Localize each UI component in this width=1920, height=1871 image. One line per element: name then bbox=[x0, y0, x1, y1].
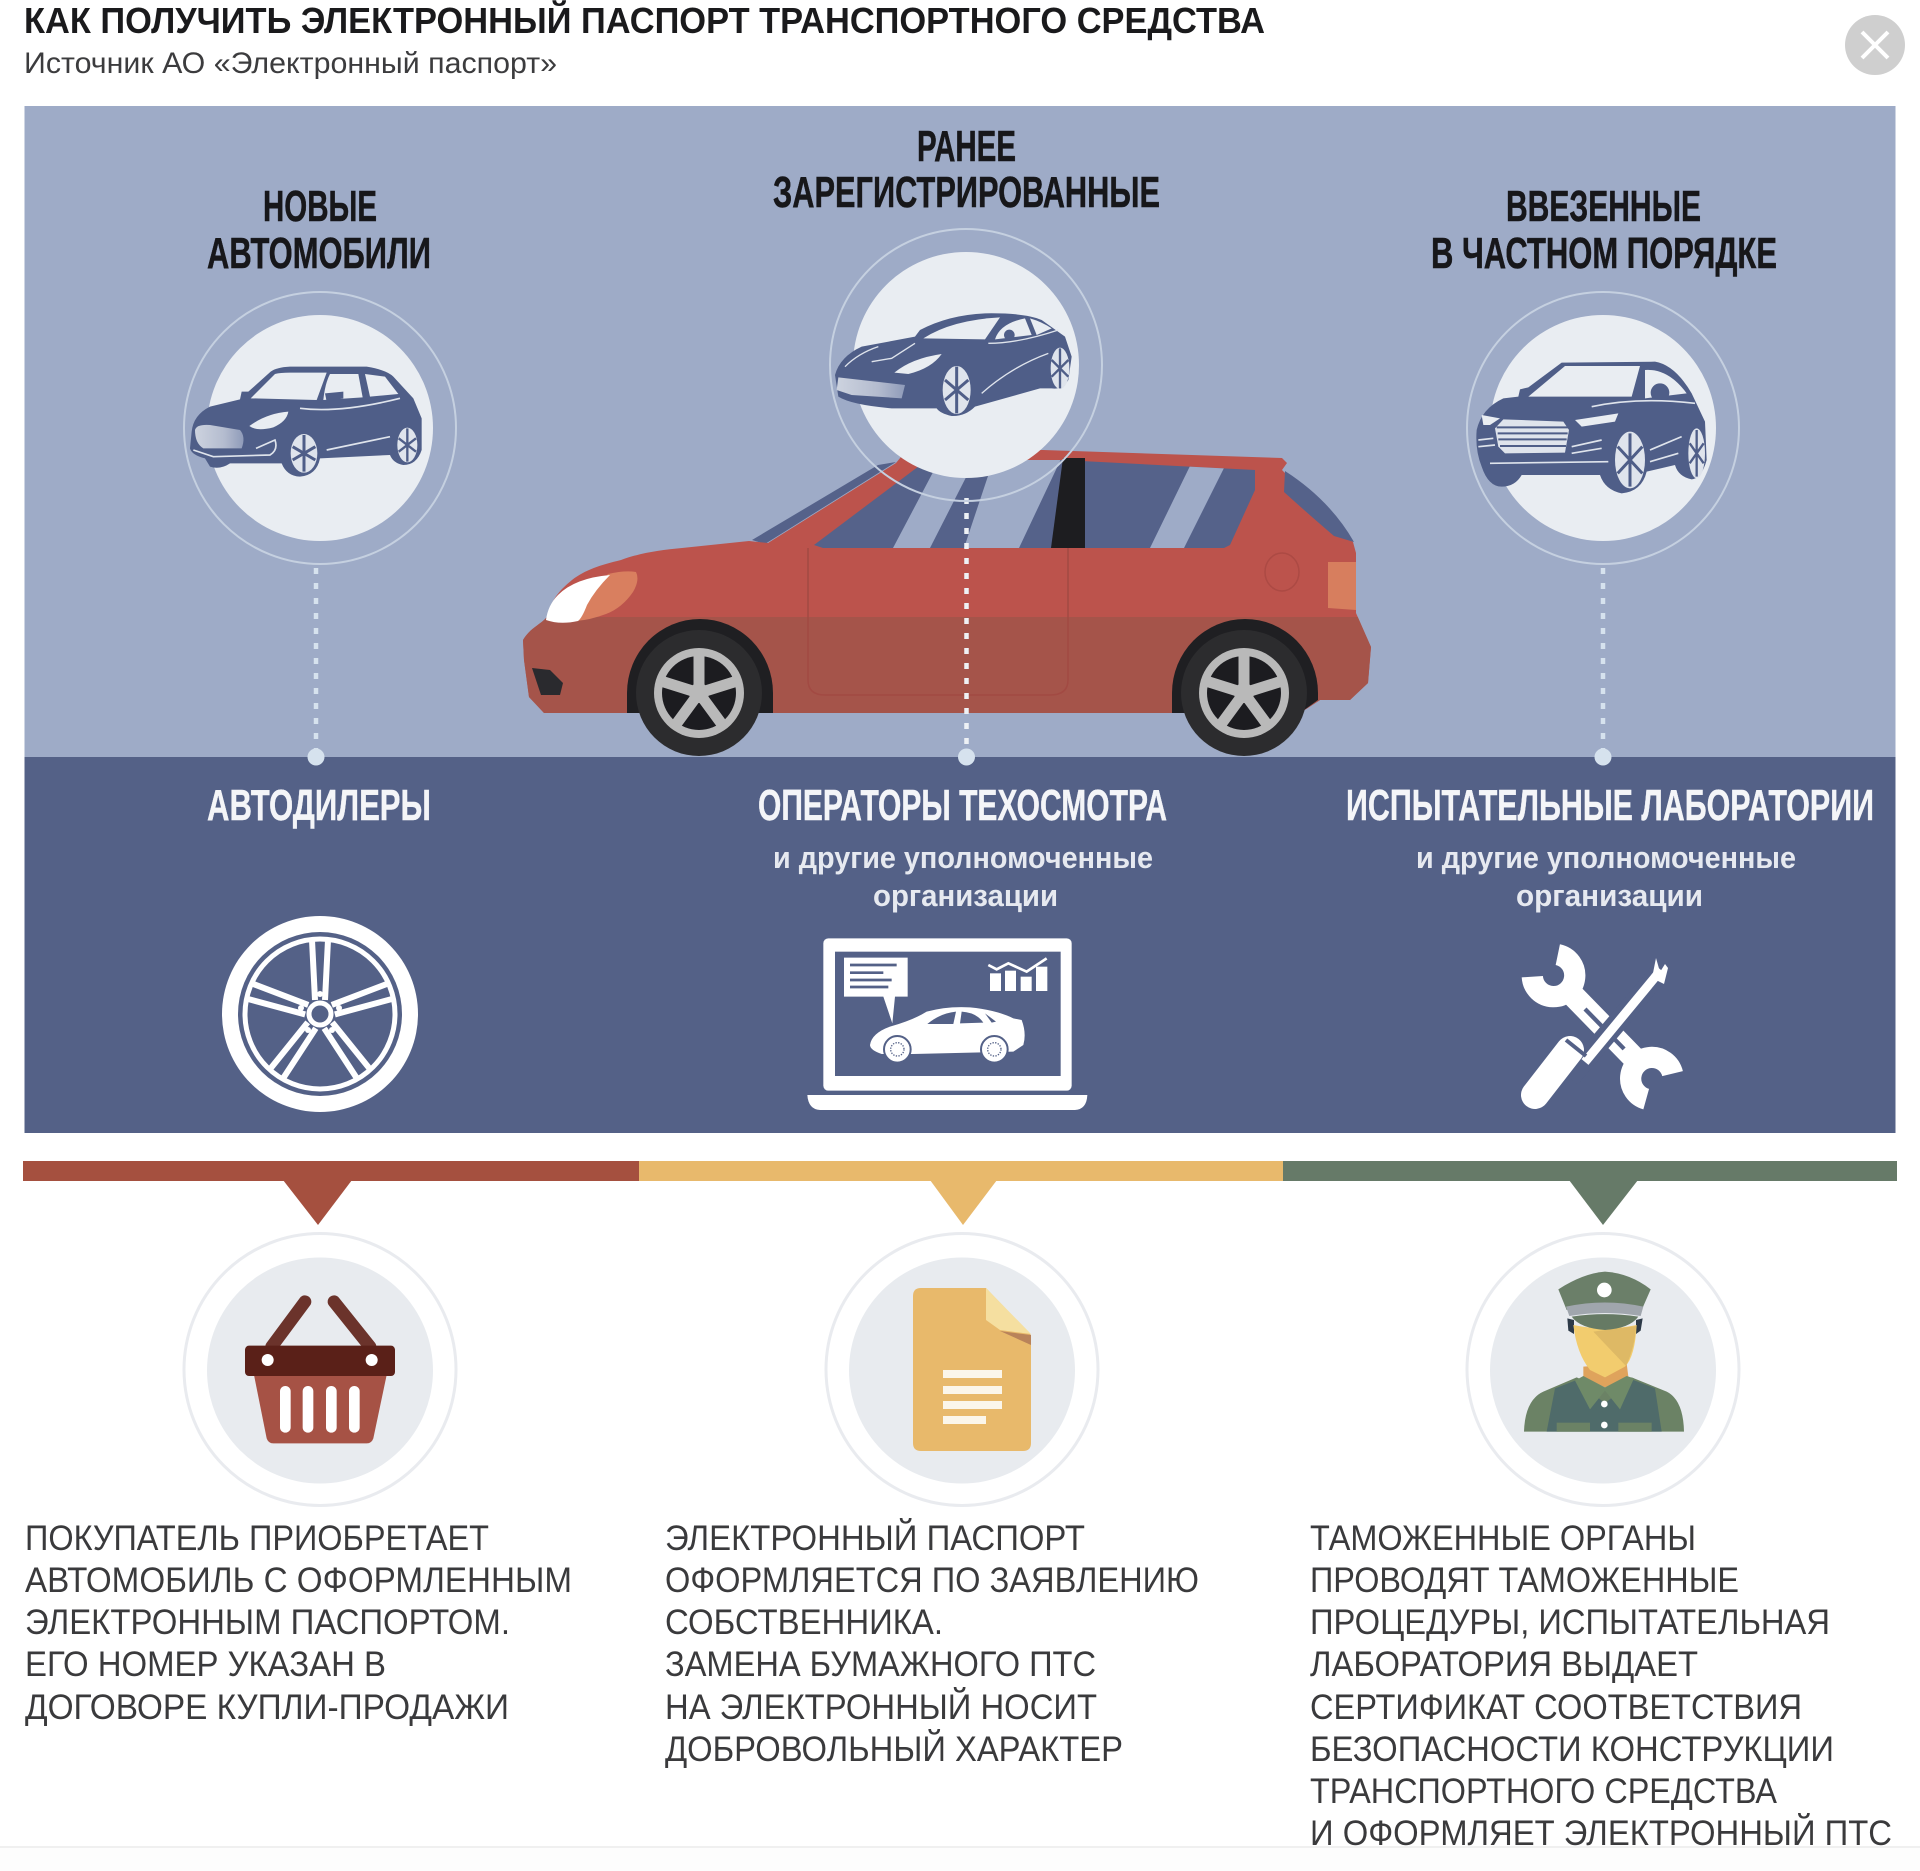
org label: inspection operators: организации bbox=[873, 878, 1058, 913]
text block: column 2: ОФОРМЛЯЕТСЯ ПО ЗАЯВЛЕНИЮ bbox=[665, 1561, 1199, 1600]
text block: column 3: БЕЗОПАСНОСТИ КОНСТРУКЦИИ bbox=[1310, 1730, 1834, 1769]
headlight white bbox=[546, 575, 610, 623]
door pillar bbox=[1051, 458, 1085, 548]
text block: column 1: ПОКУПАТЕЛЬ ПРИОБРЕТАЕТ bbox=[25, 1519, 489, 1558]
colour bar: yellow bbox=[639, 1161, 1283, 1225]
source line: Источник АО «Электронный паспорт» bbox=[24, 47, 557, 80]
heading: previously registered: ЗАРЕГИСТРИРОВАННЫЕ bbox=[773, 168, 1160, 217]
window reflections bbox=[893, 460, 1224, 548]
connector: left dotted line bbox=[308, 568, 324, 766]
text block: column 1: ДОГОВОРЕ КУПЛИ-ПРОДАЖИ bbox=[25, 1688, 509, 1727]
text block: column 3: ТРАНСПОРТНОГО СРЕДСТВА bbox=[1310, 1772, 1778, 1811]
windscreen strip bbox=[752, 462, 896, 544]
heading: new cars bbox=[207, 182, 431, 278]
icon: coupe bbox=[835, 313, 1072, 416]
connector: right dotted line bbox=[1594, 568, 1612, 766]
heading: privately imported: ВВЕЗЕННЫЕ bbox=[1506, 182, 1701, 231]
heading: new cars: НОВЫЕ bbox=[263, 182, 377, 231]
text block: column 3: ЛАБОРАТОРИЯ ВЫДАЕТ bbox=[1310, 1645, 1698, 1684]
text block: column 2: ДОБРОВОЛЬНЫЙ ХАРАКТЕР bbox=[665, 1729, 1123, 1769]
icon: officer bbox=[1524, 1272, 1684, 1432]
side windows bbox=[814, 460, 1255, 548]
icon: alloy wheel bbox=[222, 916, 418, 1112]
text block: column 2: ЗАМЕНА БУМАЖНОГО ПТС bbox=[665, 1645, 1096, 1684]
lower body shade bbox=[515, 617, 1375, 717]
panel: vehicle types (upper) bbox=[24, 106, 1896, 757]
icon: hatchback bbox=[190, 367, 422, 477]
title: КАК ПОЛУЧИТЬ ЭЛЕКТРОННЫЙ ПАСПОРТ ТРАНСПОРТНОГО СРЕДСТВА bbox=[24, 0, 1265, 41]
icon: laptop with car bbox=[807, 938, 1087, 1110]
text block: column 3 bbox=[1310, 1519, 1892, 1853]
org label: inspection operators: и другие уполномоченные bbox=[773, 840, 1153, 875]
car body bbox=[523, 450, 1371, 713]
heading: privately imported bbox=[1431, 182, 1777, 278]
org label: dealers: АВТОДИЛЕРЫ bbox=[207, 781, 431, 830]
circle: new car bbox=[184, 292, 456, 564]
icon: wrench and screwdriver bbox=[1532, 955, 1673, 1099]
circle: basket bbox=[184, 1234, 456, 1506]
headlight amber bbox=[576, 571, 637, 621]
fog slot bbox=[532, 668, 563, 695]
circle: document bbox=[826, 1234, 1098, 1506]
colour bar: red bbox=[23, 1161, 639, 1225]
circle: customs officer bbox=[1467, 1234, 1739, 1506]
circle: imported car bbox=[1467, 292, 1739, 564]
rear wheel bbox=[1172, 619, 1318, 756]
text block: column 2: НА ЭЛЕКТРОННЫЙ НОСИТ bbox=[665, 1687, 1097, 1727]
text block: column 3: И ОФОРМЛЯЕТ ЭЛЕКТРОННЫЙ ПТС bbox=[1310, 1813, 1892, 1853]
text block: column 3: ПРОВОДЯТ ТАМОЖЕННЫЕ bbox=[1310, 1561, 1739, 1600]
fuel cap bbox=[1265, 553, 1299, 591]
org label: test laboratories: и другие уполномоченные bbox=[1416, 840, 1796, 875]
org label: inspection operators bbox=[758, 781, 1167, 913]
org label: inspection operators: ОПЕРАТОРЫ ТЕХОСМОТРА bbox=[758, 781, 1167, 830]
org label: test laboratories: организации bbox=[1516, 878, 1703, 913]
text block: column 3: ТАМОЖЕННЫЕ ОРГАНЫ bbox=[1310, 1519, 1696, 1558]
heading: previously registered: РАНЕЕ bbox=[917, 122, 1016, 171]
text block: column 2 bbox=[665, 1518, 1199, 1769]
taillight bbox=[1328, 562, 1356, 610]
rear window strip bbox=[1284, 471, 1354, 542]
heading: previously registered bbox=[773, 122, 1160, 217]
text block: column 3: ПРОЦЕДУРЫ, ИСПЫТАТЕЛЬНАЯ bbox=[1310, 1603, 1830, 1642]
door lines bbox=[808, 548, 1068, 695]
close button bbox=[1845, 15, 1905, 75]
text block: column 1: ЕГО НОМЕР УКАЗАН В bbox=[25, 1645, 386, 1684]
colour bar: green bbox=[1283, 1161, 1897, 1225]
front wheel bbox=[627, 619, 773, 756]
heading: privately imported: В ЧАСТНОМ ПОРЯДКЕ bbox=[1431, 229, 1777, 278]
heading: new cars: АВТОМОБИЛИ bbox=[207, 229, 431, 278]
text block: column 1: ЭЛЕКТРОННЫМ ПАСПОРТОМ. bbox=[25, 1603, 510, 1642]
text block: column 2: ЭЛЕКТРОННЫЙ ПАСПОРТ bbox=[665, 1518, 1085, 1558]
circle: registered car bbox=[830, 229, 1102, 501]
illustration: red hatchback bbox=[515, 440, 1375, 756]
icon: shopping basket bbox=[245, 1302, 395, 1443]
icon: document bbox=[913, 1288, 1031, 1451]
connector: centre dotted line bbox=[958, 498, 975, 766]
text block: column 1: АВТОМОБИЛЬ С ОФОРМЛЕННЫМ bbox=[25, 1561, 572, 1600]
org label: test laboratories bbox=[1346, 781, 1874, 913]
icon: suv bbox=[1476, 362, 1707, 493]
panel: organisations (lower) bbox=[24, 757, 1896, 1133]
text block: column 2: СОБСТВЕННИКА. bbox=[665, 1603, 943, 1642]
footer strip bbox=[0, 1847, 1920, 1871]
text block: column 3: СЕРТИФИКАТ СООТВЕТСТВИЯ bbox=[1310, 1688, 1802, 1727]
text block: column 1 bbox=[25, 1519, 572, 1727]
